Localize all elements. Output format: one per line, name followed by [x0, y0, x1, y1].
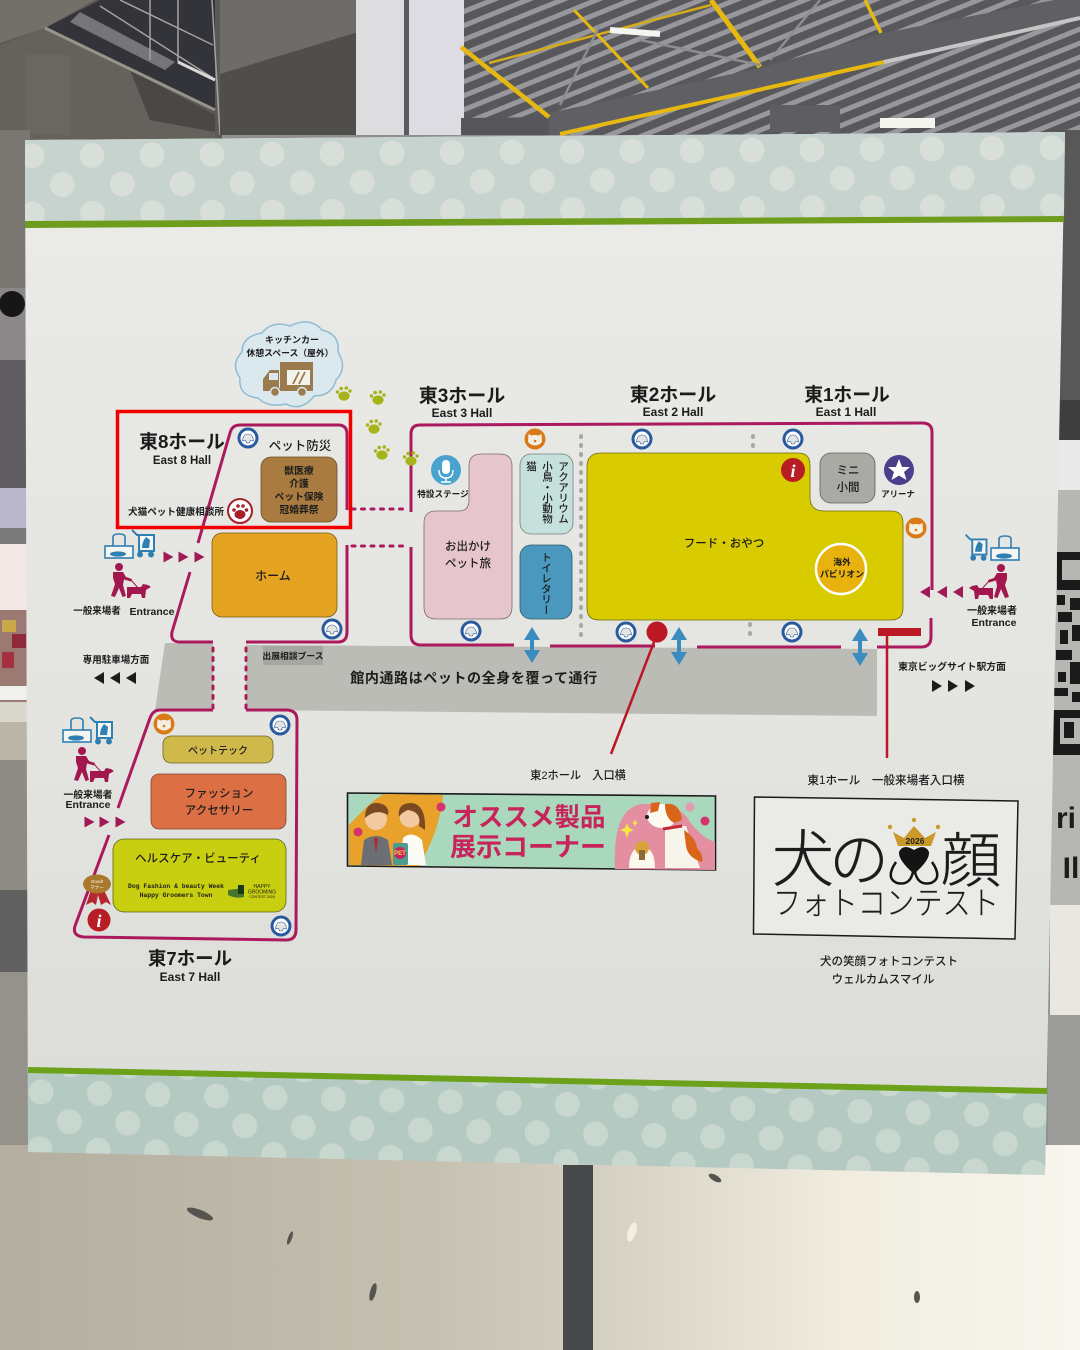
hall title: 東1: East 1 Hall — [816, 405, 876, 419]
cloud: kitchen car rest area: キッチンカー — [265, 335, 319, 345]
panel: map board — [25, 132, 1065, 1175]
caption: welcome smile: ウェルカムスマイル — [832, 973, 935, 986]
booth: mini hall: 小間 — [836, 481, 860, 494]
booth: fashion — [151, 774, 286, 829]
hall 8 contents — [128, 428, 342, 640]
booth: mini hall: ミニ — [836, 465, 860, 477]
entrance east: Entrance — [972, 617, 1017, 629]
logo: happy grooming contest — [228, 884, 276, 899]
station direction: 東京ビッグサイト駅方面 — [898, 660, 1006, 673]
booth: mini hall — [820, 453, 875, 503]
hall title: 東3: East 3 Hall — [432, 406, 492, 420]
icon: crown 2026 — [888, 818, 940, 846]
hall titles: 東8: East 8 Hall — [153, 455, 211, 467]
hall titles: 東8: 東8ホール — [139, 431, 225, 452]
hall title: 東2: 東2ホール — [630, 384, 716, 406]
booth: healthcare and beauty — [113, 839, 286, 912]
icon: arena star — [881, 455, 915, 499]
halls 1-3 outline — [411, 423, 932, 647]
entrance west: hall 7 — [63, 717, 126, 828]
icon: good manner ribbon: マナー — [90, 885, 104, 891]
logo panel: dog smile photo contest: フォトコンテスト — [773, 878, 999, 924]
concrete pillar — [220, 0, 360, 135]
booth: small animals and aquarium: アクアリウム — [557, 461, 569, 524]
booth: pet tech — [163, 736, 273, 763]
cloud: kitchen car rest area: 休憩スペース（屋外） — [247, 347, 333, 358]
icon: special stage microphone — [417, 455, 469, 499]
booth: toiletry: トイレタリー — [540, 552, 552, 615]
hall title: 東1 — [804, 384, 890, 419]
icon: red paw badge — [228, 499, 252, 523]
hall 7 outline — [74, 710, 297, 940]
entrance west: hall 7: 一般来場者 — [64, 788, 113, 801]
highlight: red frame on hall 8 — [118, 412, 350, 528]
overseas pavilion circle: パビリオン — [820, 568, 864, 579]
label: pet health consultation: 犬猫ペット健康相談所 — [128, 506, 224, 518]
left strip scenery — [0, 130, 30, 1160]
booth: fashion: アクセサリー — [185, 804, 253, 817]
booth: fashion: ファッション — [184, 788, 254, 800]
callout: east 1 entrance marker: 東1ホール 一般来場者入口横 — [807, 773, 965, 787]
hall partition dots — [581, 436, 753, 636]
illustration: dog and hamster — [615, 802, 715, 870]
booth: veterinary group: 冠婚葬祭 — [279, 503, 319, 516]
booth: お出かけ ペット旅: ペット旅 — [445, 556, 491, 570]
entrance west: hall 8 — [73, 530, 204, 618]
dotted connector lines — [213, 509, 408, 708]
hall 7 contents — [83, 714, 292, 936]
corridor grey areas — [155, 643, 877, 716]
caption: welcome smile — [820, 954, 958, 986]
hall title: 東2 — [630, 384, 716, 419]
logo panel: dog smile photo contest: 顔 — [941, 813, 1001, 900]
booth: small animals and aquarium: 小鳥・小動物 — [541, 461, 553, 525]
illustration: flowers — [354, 802, 710, 836]
icon: information — [781, 458, 805, 482]
booth: healthcare and beauty: Dog Fashion & beauty Week — [128, 883, 224, 890]
booth: food and snacks: フード・おやつ — [684, 537, 764, 550]
hall title: 東1: 東1ホール — [804, 384, 890, 405]
logo: happy grooming contest: CONTEST 2026 — [249, 895, 275, 899]
icon: good manner ribbon — [83, 874, 111, 905]
booth: home — [212, 533, 337, 617]
icon: dog head, hall 8 bottom — [322, 618, 342, 640]
right strip scenery with QR sign: Il — [1063, 852, 1079, 885]
icon: dog heads, hall 7 — [154, 714, 292, 936]
overseas pavilion circle: 海外 — [833, 556, 851, 567]
icon: crown 2026: 2026 — [906, 836, 925, 846]
booth: healthcare and beauty: Happy Groomers Town — [140, 892, 213, 899]
icon: information, hall 7: i — [96, 911, 102, 931]
top green rule — [25, 216, 1064, 228]
exhibitor consultation booth label: 出展相談ブース — [262, 650, 324, 661]
icon: good manner ribbon: Good! — [91, 879, 103, 884]
hall title: 東7: East 7 Hall — [160, 970, 220, 984]
left upper wall and truss — [0, 0, 222, 140]
top dotted band — [25, 132, 1065, 221]
callout: east 2 entrance pin: 東2ホール 入口横 — [530, 768, 626, 782]
entrance west: hall 7: Entrance — [66, 799, 111, 811]
icon: paw trail — [336, 386, 419, 466]
station direction — [898, 660, 1006, 692]
parking direction — [83, 654, 150, 684]
white columns — [356, 0, 465, 135]
hall title: 東7: 東7ホール — [148, 948, 232, 969]
booth: small animals and aquarium: 猫 — [525, 460, 537, 472]
hall title: 東3 — [419, 385, 505, 420]
booth: veterinary group — [261, 457, 337, 522]
banner: recommended products corner: 展示コーナー — [450, 832, 606, 862]
ceiling trusses — [461, 0, 1080, 135]
illustration: orange blob and two staff — [349, 794, 443, 866]
illustration: orange blob and two staff: PET — [394, 851, 406, 857]
hall title: 東7 — [148, 948, 232, 984]
logo panel: dog smile photo contest: 犬 — [772, 809, 834, 899]
entrance east: 一般来場者 — [967, 604, 1017, 617]
bottom green rule — [28, 1067, 1047, 1094]
label: pet disaster prevention: ペット防災 — [269, 439, 332, 453]
icons: dog heads, east halls — [460, 428, 926, 642]
caption: welcome smile: 犬の笑顔フォトコンテスト — [820, 954, 958, 968]
entrance west: hall 8: Entrance — [130, 606, 175, 618]
callout: east 2 entrance pin — [530, 622, 668, 782]
booth: food and snacks — [587, 453, 903, 620]
logo panel: dog smile photo contest: の — [829, 812, 889, 899]
callout: east 1 entrance marker — [807, 628, 965, 787]
icon: information, hall 7 — [88, 908, 110, 932]
booth: お出かけ ペット旅 — [424, 454, 512, 619]
icon: food truck — [263, 362, 313, 396]
booth: veterinary group: 獣医療 — [284, 464, 314, 477]
booth: home: ホーム — [255, 569, 291, 583]
booth: toiletry — [520, 545, 572, 619]
icon: heart with paw arcs — [891, 847, 937, 884]
booth: small animals and aquarium — [520, 454, 573, 534]
bottom dotted band — [28, 1072, 1047, 1175]
icon: dog head, hall 8 top — [238, 428, 258, 448]
booth: veterinary group: ペット保険 — [275, 490, 324, 503]
banner: recommended products corner — [348, 793, 716, 870]
entrance west: hall 8: 一般来場者 — [73, 605, 121, 617]
booth: pet tech: ペットテック — [188, 745, 248, 757]
hall titles: 東8 — [139, 431, 225, 467]
icon: arena star: アリーナ — [881, 489, 915, 499]
exhibitor consultation booth label — [262, 646, 324, 665]
entrance east — [920, 535, 1019, 629]
booth: veterinary group: 介護 — [289, 477, 309, 490]
logo: happy grooming contest: HAPPY — [254, 884, 271, 890]
booth: healthcare and beauty: ヘルスケア・ビューティ — [135, 852, 261, 865]
hall title: 東2: East 2 Hall — [643, 405, 703, 419]
right strip scenery with QR sign: ri — [1056, 802, 1076, 835]
logo panel: dog smile photo contest — [754, 797, 1018, 939]
sign pole — [563, 1165, 593, 1350]
hall title: 東3: 東3ホール — [419, 385, 505, 407]
icon: information: i — [790, 461, 796, 481]
right strip scenery with QR sign — [1048, 130, 1080, 1145]
booth: お出かけ ペット旅: お出かけ — [445, 540, 491, 553]
corridor notice: 館内通路はペットの全身を覆って通行 — [350, 670, 598, 686]
icon: special stage microphone: 特設ステージ — [417, 488, 469, 499]
parking direction: 専用駐車場方面 — [83, 654, 150, 666]
cloud: kitchen car rest area — [235, 322, 343, 407]
hall 8 outline — [172, 425, 347, 642]
arrows: passage double arrows — [524, 627, 868, 666]
banner text: オススメ製品 — [452, 804, 606, 832]
overseas pavilion circle — [816, 544, 866, 594]
floor — [0, 1145, 1080, 1350]
logo: happy grooming contest: GROOMING — [248, 890, 276, 896]
